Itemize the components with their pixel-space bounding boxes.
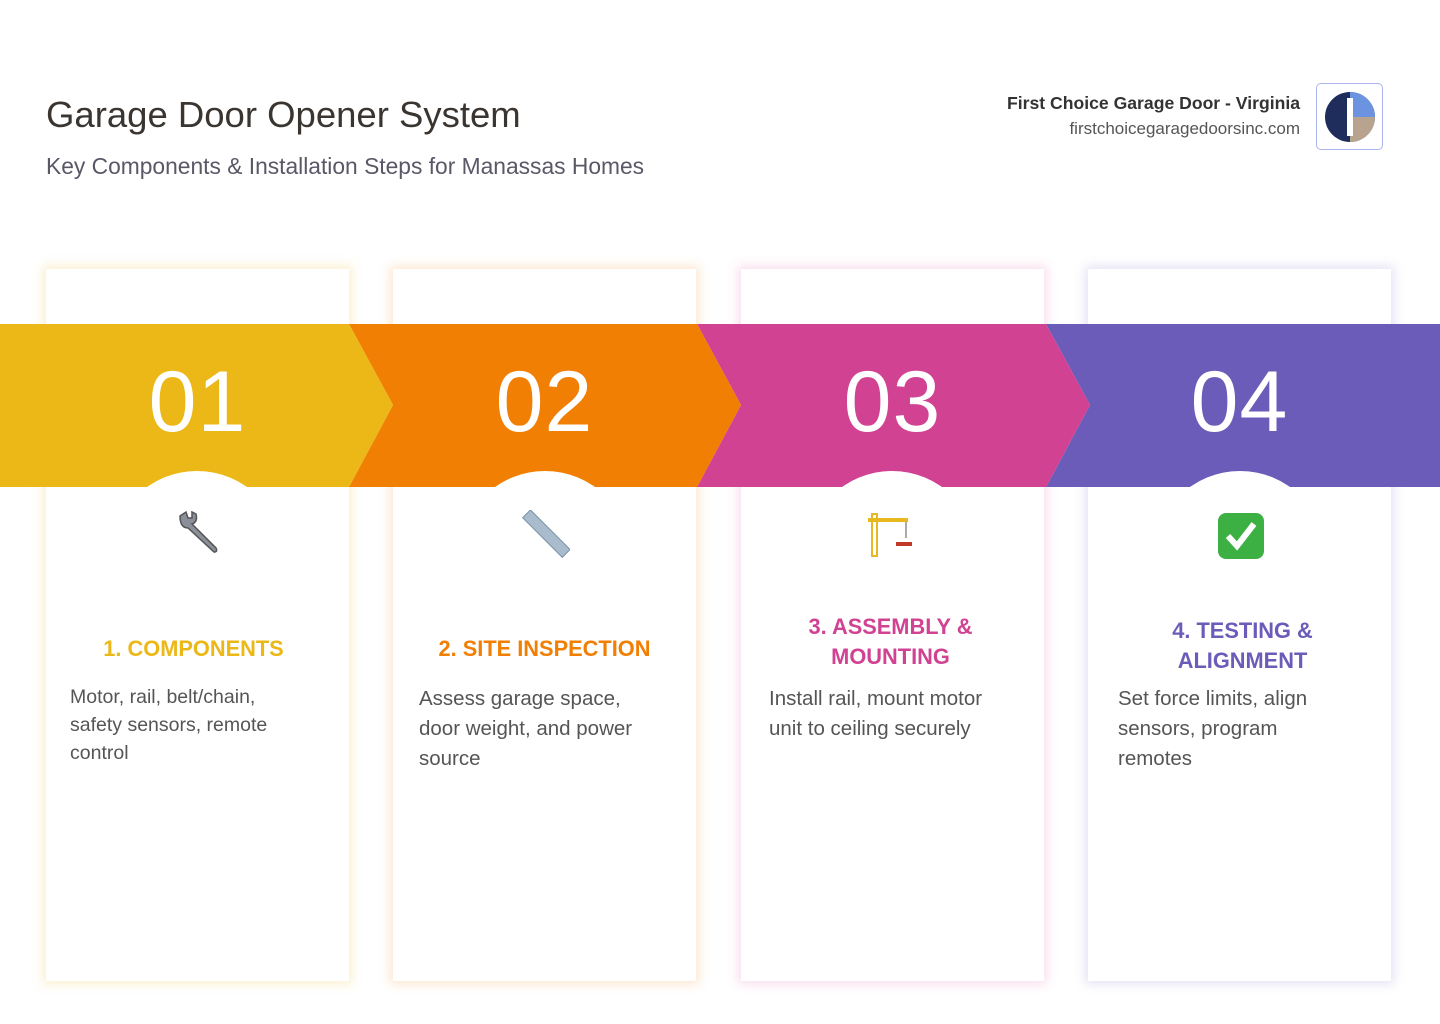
heading 2: 2. SITE INSPECTION <box>439 636 650 661</box>
heading 4 <box>1172 618 1313 673</box>
heading 4: ALIGNMENT <box>1178 648 1307 673</box>
brand text: First Choice Garage Door - Virginia <box>1007 93 1300 113</box>
text 1: Motor, rail, belt/chain, safety sensors, remote control <box>70 686 267 764</box>
text 3: Install rail, mount motor unit to ceiling securely <box>769 687 982 740</box>
icon: check <box>1218 513 1264 559</box>
logo <box>1316 83 1383 150</box>
arrow band <box>0 324 1440 487</box>
text 2: Assess garage space, door weight, and power source <box>419 687 632 770</box>
title: Garage Door Opener System <box>46 94 521 135</box>
card 4 <box>1088 269 1391 981</box>
heading 3: MOUNTING <box>831 644 950 669</box>
card 2 <box>393 269 696 981</box>
card 1 <box>46 269 349 981</box>
text 4: Set force limits, align sensors, program remotes <box>1118 687 1307 770</box>
text: 03 <box>844 354 941 450</box>
numbers: 01 <box>149 354 246 450</box>
heading 4: 4. TESTING & <box>1172 618 1313 643</box>
heading 1: 1. COMPONENTS <box>103 636 284 661</box>
brand text: firstchoicegaragedoorsinc.com <box>1069 119 1300 138</box>
icon: crane <box>868 513 912 557</box>
icon: ruler <box>522 510 570 558</box>
brand text <box>1007 93 1300 138</box>
icon: wrench <box>179 510 218 553</box>
text: 04 <box>1191 354 1288 450</box>
text: 02 <box>496 354 593 450</box>
heading 3: 3. ASSEMBLY & <box>809 614 972 639</box>
card 3 <box>741 269 1044 981</box>
subtitle: Key Components & Installation Steps for Manassas Homes <box>46 153 644 179</box>
heading 3 <box>809 614 972 669</box>
